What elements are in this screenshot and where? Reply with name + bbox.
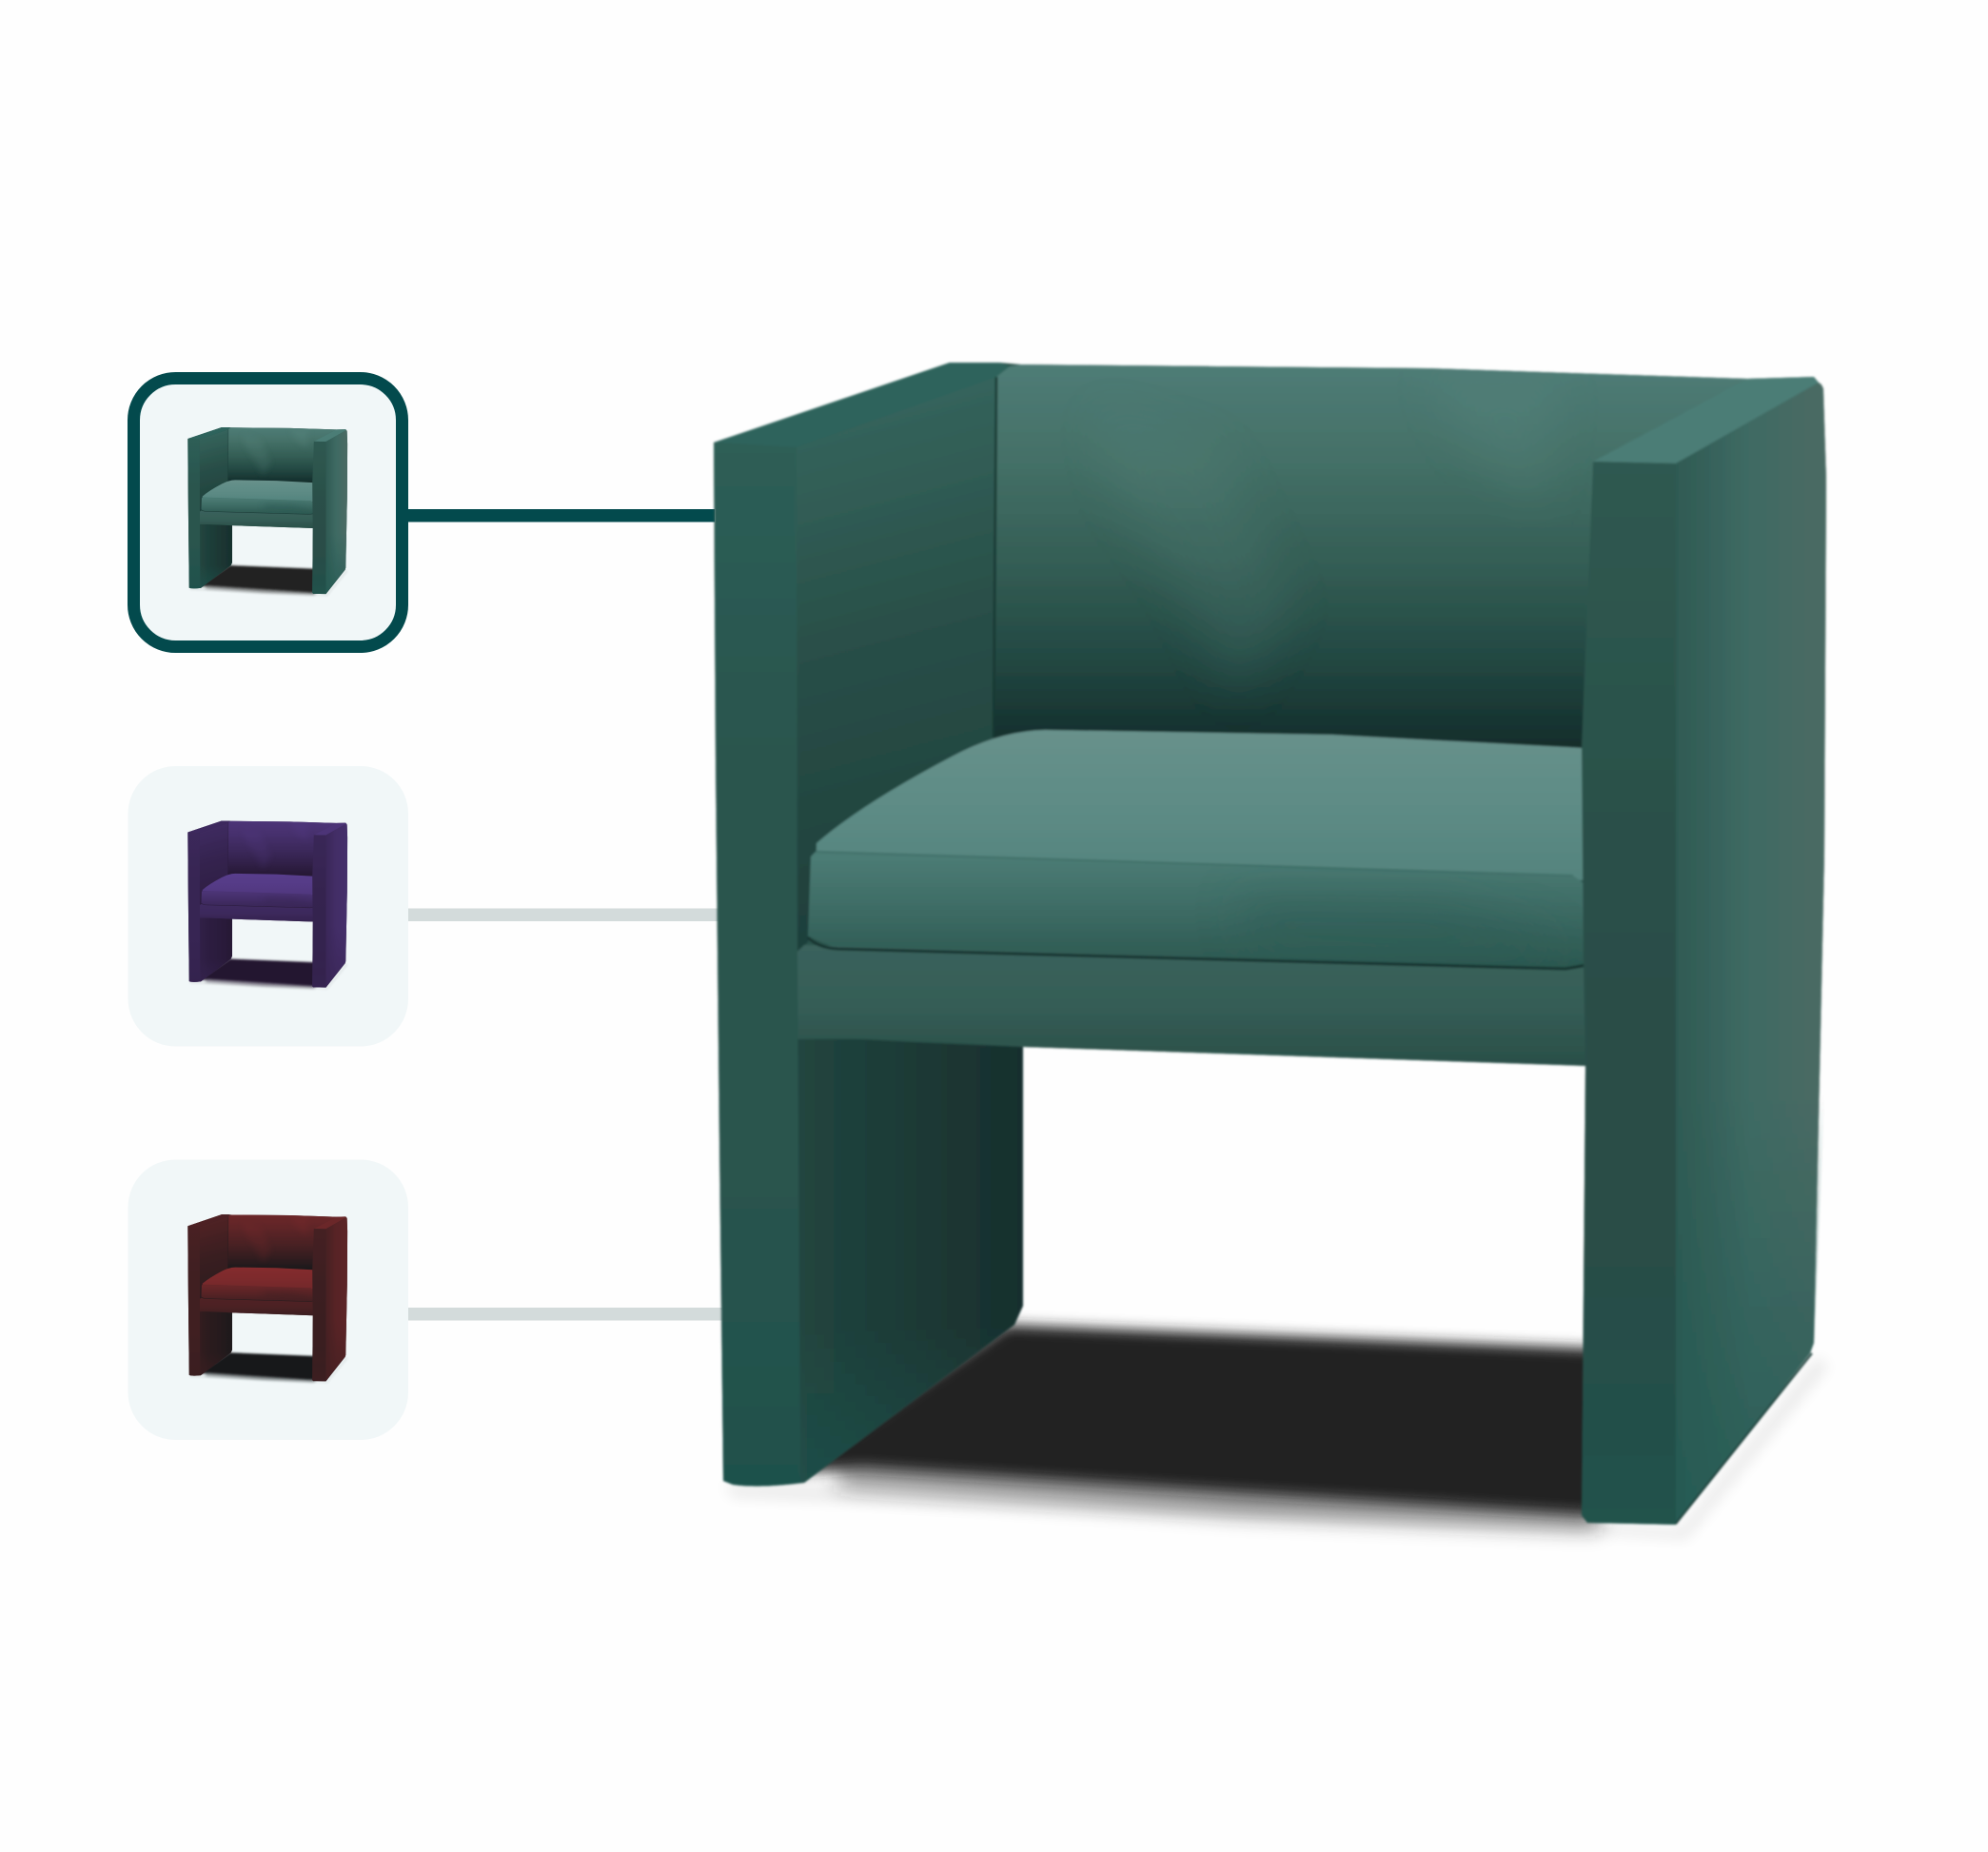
swatch card	[133, 379, 402, 647]
option: teal (selected)	[133, 379, 402, 647]
floor shadow: soft halo	[723, 1356, 1829, 1540]
seat underside line	[808, 937, 1587, 969]
seat cushion front	[808, 851, 1587, 968]
main chair	[714, 363, 1829, 1540]
connector line: red option	[408, 1308, 722, 1321]
right arm front face	[1582, 462, 1676, 1525]
floor shadow: soft lower band	[837, 1456, 1599, 1528]
floor shadow: dark	[790, 1325, 1599, 1515]
option: purple	[128, 766, 408, 1047]
inner corner line	[994, 377, 996, 738]
option: red	[128, 1159, 408, 1440]
chair upholstery	[714, 363, 1826, 1525]
seat mottling	[1237, 899, 1561, 961]
left arm inner wall	[797, 377, 996, 952]
connector line: purple option	[408, 908, 718, 921]
left leg inner side	[797, 1035, 1023, 1483]
right foot edge	[1676, 1353, 1812, 1524]
silhouette base	[714, 363, 1826, 1525]
thumbnail chair	[187, 427, 348, 596]
thumbnail chair	[187, 820, 348, 990]
seat cushion top	[817, 730, 1584, 880]
front rail	[797, 945, 1589, 1066]
swatch card	[128, 766, 408, 1047]
seat seam	[817, 852, 1573, 876]
backrest	[994, 364, 1747, 752]
left arm top	[714, 363, 1010, 447]
thumbnail chair	[187, 1214, 348, 1384]
right side panel	[1676, 383, 1826, 1525]
swatch card	[128, 1159, 408, 1440]
seat cushion	[808, 730, 1587, 969]
left arm front face	[714, 443, 800, 1487]
connector line: teal option	[408, 509, 715, 522]
right arm top	[1593, 377, 1819, 463]
